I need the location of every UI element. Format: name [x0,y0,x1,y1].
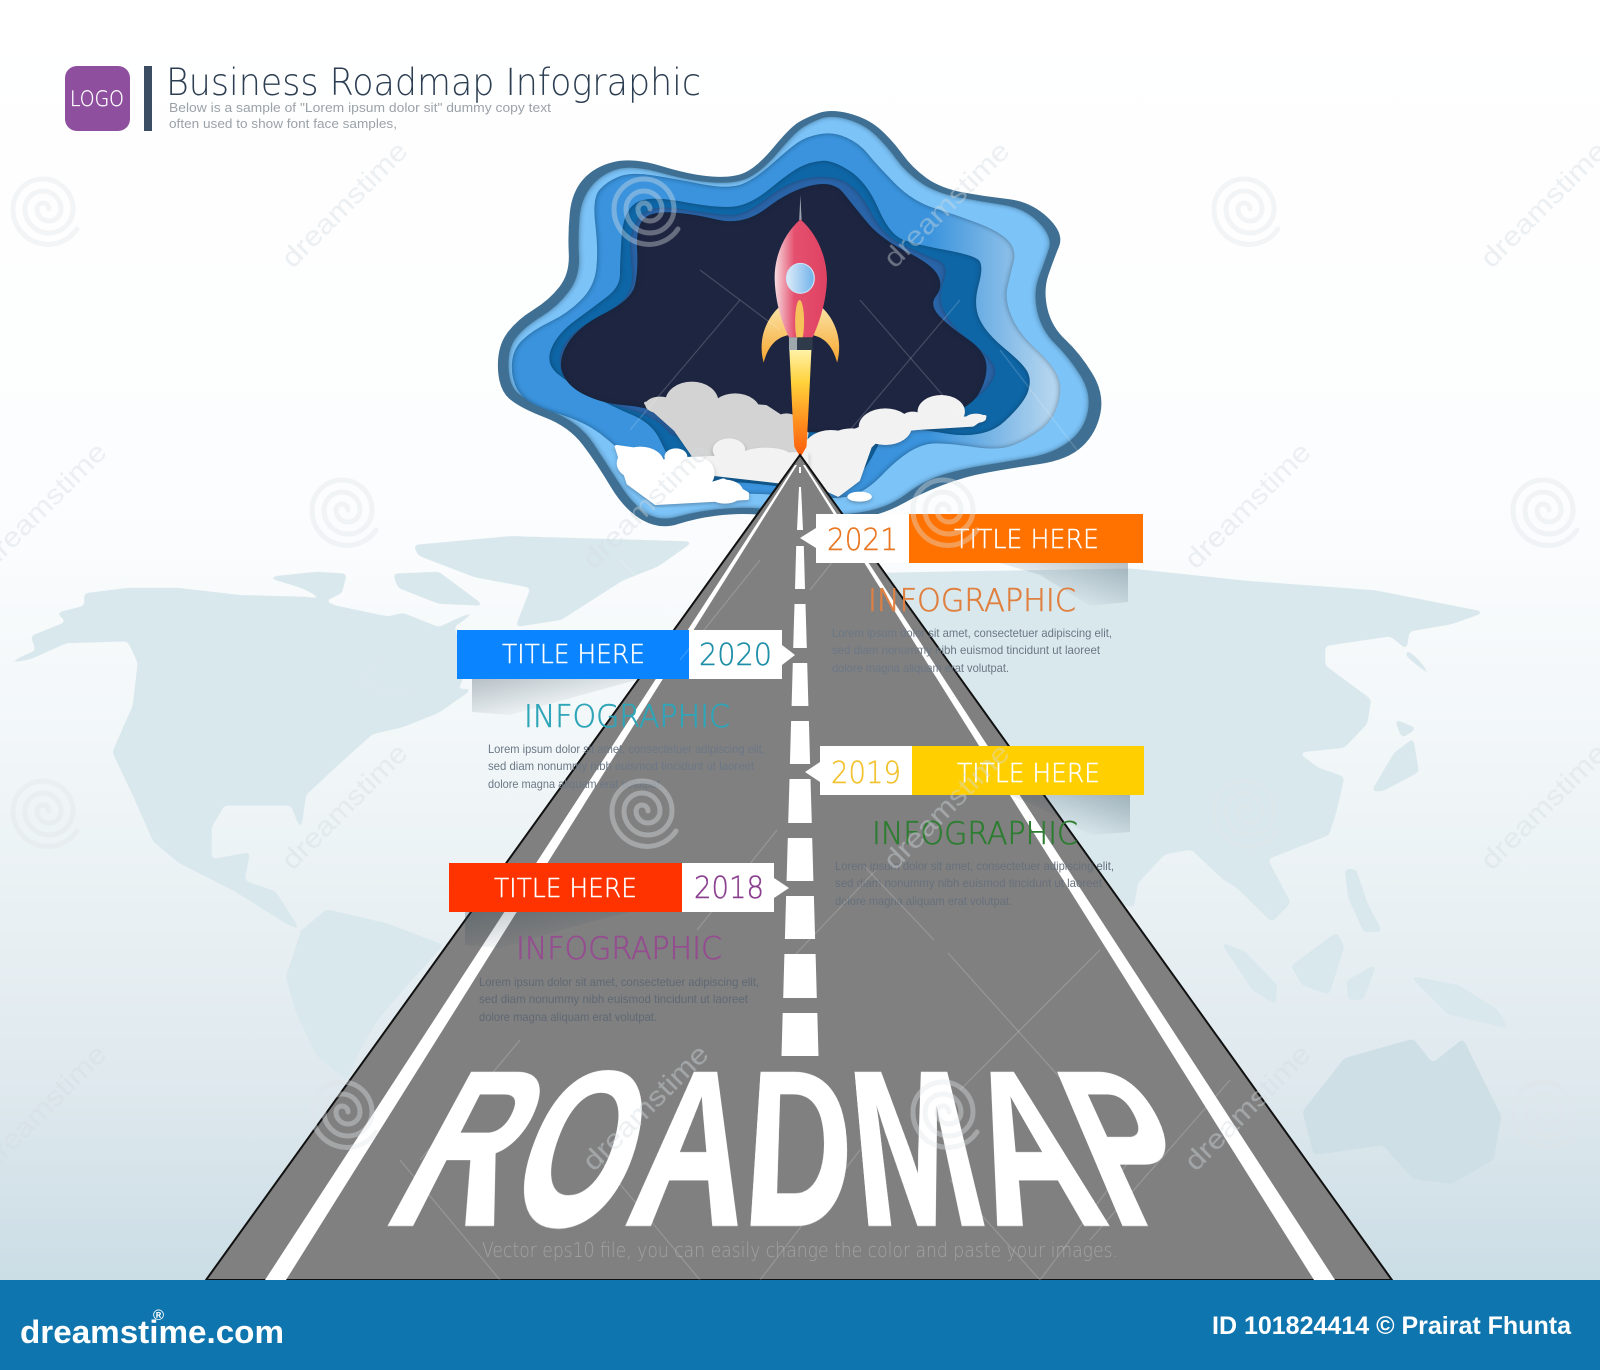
title bar 2020 [457,630,689,679]
body 2020: Lorem ipsum dolor sit amet, consectetuer adipiscing elit, [488,742,765,756]
title bar 2019: TITLE HERE [957,759,1100,789]
year tab 2021: 2021 [827,523,898,558]
year tab 2019: 2019 [831,756,901,791]
cloud: left white bank [617,447,872,504]
rocket left fin [762,307,789,363]
logo badge: LOGO [70,87,124,111]
body 2020: sed diam nonummy nibh euismod tincidunt ut laoreet [488,759,755,773]
watermark wordmarks: dreamstime [576,436,715,575]
watermark spirals [13,179,1577,1147]
portal layer: deep blue [549,161,1030,492]
title bar 2020: TITLE HERE [502,640,645,670]
cloud: grey smoke [645,382,853,458]
shadow 2018 [465,912,630,948]
watermark wordmarks: dreamstime [1474,135,1600,274]
title bar 2021: TITLE HERE [954,525,1099,555]
map: asia pacific islands [1220,719,1509,1029]
body 2021 [832,626,1112,675]
watermark wordmarks: dreamstime [576,1038,715,1177]
milestone 2018 [449,863,789,1024]
papercut portal with rocket [498,111,1101,526]
milestone 2021 [800,514,1143,675]
body 2020: dolore magna aliquam erat volutpat. [488,777,663,791]
watermark wordmarks [0,135,1600,1177]
rocket [762,195,839,457]
body 2019 [835,859,1114,908]
year tab 2019 [805,746,912,795]
portal layer: slate rim [498,111,1101,526]
subtitle: Below is a sample of "Lorem ipsum dolor sit" dummy copy text [169,100,551,115]
map: australia [1302,1039,1501,1184]
road right edge line [803,465,1335,1280]
road surface [206,455,1392,1280]
milestone 2020 [457,630,795,791]
body 2021: Lorem ipsum dolor sit amet, consectetuer adipiscing elit, [832,626,1112,640]
body 2018 [479,975,759,1024]
vector caption: Vector eps10 file, you can easily change the color and paste your images. [482,1238,1118,1262]
rocket nozzle [789,337,813,350]
watermark wordmarks: dreamstime [275,135,414,274]
year tab 2018: 2018 [694,871,764,906]
watermark wordmarks: dreamstime [877,737,1016,876]
body 2021: dolore magna aliquam erat volutpat. [832,661,1009,675]
title bar 2018 [449,863,682,912]
milestone 2019 [805,746,1144,908]
header divider [144,66,152,131]
body 2019: sed diam nonummy nibh euismod tincidunt ut laoreet [835,876,1103,890]
body 2018: Lorem ipsum dolor sit amet, consectetuer adipiscing elit, [479,975,759,989]
map: eurasia and africa [847,568,1486,922]
portal layer: mid blue [512,133,1060,498]
body 2018: sed diam nonummy nibh euismod tincidunt ut laoreet [479,992,749,1006]
heading 2020: INFOGRAPHIC [524,699,730,735]
map: greenland [413,536,694,627]
subtitle [169,100,551,131]
heading 2018: INFOGRAPHIC [516,931,722,967]
road centre dashes [782,467,818,1056]
map: south america [286,909,444,1081]
year tab 2020: 2020 [699,638,772,673]
watermark wordmarks: dreamstime [877,135,1016,274]
title bar 2018: TITLE HERE [494,874,637,904]
watermark wordmarks: dreamstime [1178,436,1317,575]
road left edge line [265,465,797,1280]
footer bar [0,1280,1600,1370]
rocket antenna [799,195,802,220]
footer brand: dreamstime.com [20,1314,284,1350]
shadow 2021 [1000,563,1128,606]
rocket window [787,263,814,293]
rocket body [775,219,827,337]
watermark wordmarks: dreamstime [1474,737,1600,876]
footer registered mark: ® [153,1307,164,1324]
world map [0,536,1509,1184]
cloud: front light plume [696,438,807,483]
map: north america [0,572,485,931]
body 2020 [488,742,765,791]
year tab 2021 [800,514,909,563]
road [206,455,1392,1280]
footer credit: ID 101824414 © Prairat Fhunta [1212,1312,1572,1340]
watermark wordmarks: dreamstime [1178,1038,1317,1177]
year tab 2020 [689,630,795,679]
portal layer: indigo [559,177,995,437]
rocket flame [789,350,811,457]
title bar 2019 [912,746,1144,795]
rocket right fin [812,307,839,363]
rocket centre fin [795,300,804,343]
header [65,61,701,131]
portal layer: night sky [561,184,986,433]
body 2018: dolore magna aliquam erat volutpat. [479,1010,657,1024]
title bar 2021 [909,514,1143,563]
logo badge [65,66,130,131]
body 2019: dolore magna aliquam erat volutpat. [835,894,1012,908]
heading 2019: INFOGRAPHIC [872,816,1078,852]
cloud: right white plume [802,395,986,495]
year tab 2018 [682,863,789,912]
portal layer: light blue [509,117,1089,519]
subtitle: often used to show font face samples, [169,116,397,131]
ROADMAP road lettering: ROADMAP [343,1037,1256,1288]
watermark wordmarks: dreamstime [275,737,414,876]
heading 2021: INFOGRAPHIC [868,583,1076,619]
shadow 2019 [1010,795,1130,835]
shadow 2020 [472,679,640,715]
body 2021: sed diam nonummy nibh euismod tincidunt ut laoreet [832,643,1101,657]
body 2019: Lorem ipsum dolor sit amet, consectetuer adipiscing elit, [835,859,1114,873]
title: Business Roadmap Infographic [166,61,701,104]
